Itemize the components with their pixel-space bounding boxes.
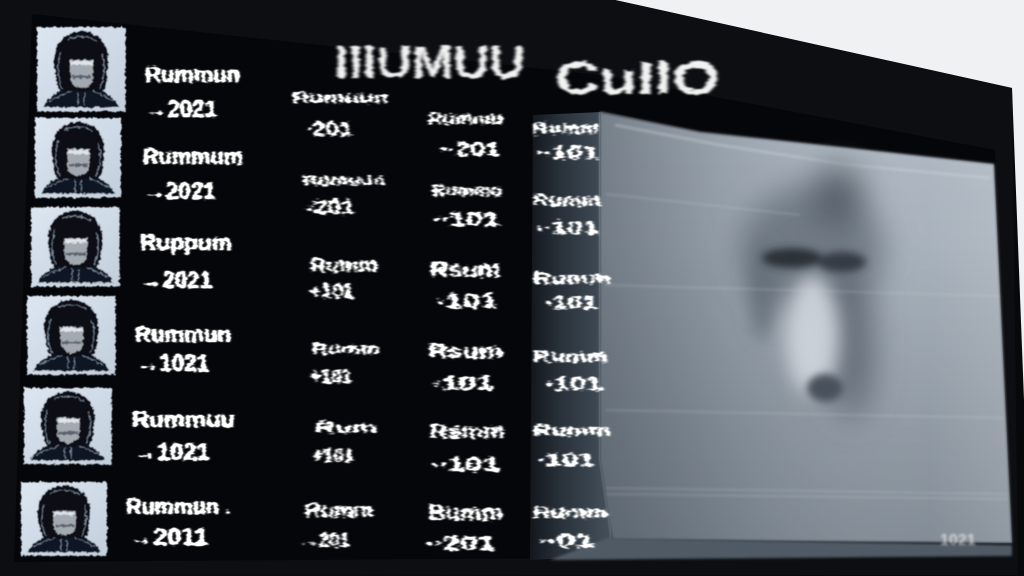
title xyxy=(335,36,720,104)
title: CuIIO xyxy=(555,52,720,104)
panel corner label: 1021 xyxy=(940,532,976,549)
fourth column: ∙101 xyxy=(545,293,597,313)
third column: Rsum xyxy=(428,341,503,363)
avatar 4 xyxy=(27,296,116,375)
names column: Rummun xyxy=(145,62,240,87)
third column: Rsum xyxy=(430,257,500,282)
third column: Rummu xyxy=(428,109,503,128)
names column: Rummum xyxy=(143,144,243,169)
names column: →2021 xyxy=(145,96,217,123)
fourth column: ∙101 xyxy=(537,450,595,470)
names column: →2021 xyxy=(143,178,216,205)
avatar 2 xyxy=(35,118,121,198)
third column xyxy=(425,109,505,555)
fourth column: Rumm xyxy=(533,421,611,440)
third column: ∙101 xyxy=(432,373,494,395)
fourth column: ∙∙101 xyxy=(535,143,599,163)
second column: →201 xyxy=(300,530,350,552)
fourth column: Rumm xyxy=(533,269,611,288)
names column: →2021 xyxy=(140,267,212,294)
second column: Rumuun xyxy=(292,90,388,107)
avatar 5 xyxy=(24,388,112,464)
second column: -201 xyxy=(305,197,355,219)
avatars xyxy=(21,27,126,556)
panel base xyxy=(600,112,1012,543)
second column xyxy=(292,90,388,552)
panel left fringe xyxy=(530,112,612,560)
avatar 3 xyxy=(31,207,120,287)
second column: ∙201 xyxy=(305,119,353,141)
names column: Rummuu xyxy=(132,407,235,432)
fourth column: ∙∙01 xyxy=(537,531,595,551)
names column: Rummun xyxy=(135,322,231,347)
names column: Rummun . xyxy=(126,494,231,519)
second column: Rum xyxy=(315,420,377,437)
second column: Rumm xyxy=(310,255,378,277)
third column: Rummu xyxy=(432,181,502,200)
third column: ∙101 xyxy=(436,291,498,313)
fourth column: ∙101 xyxy=(545,374,603,394)
third column: ∙∙201 xyxy=(440,139,500,161)
second column: +101 xyxy=(310,281,354,303)
second column: Rumm xyxy=(312,341,380,358)
panel lower band xyxy=(550,538,1012,560)
fourth column: Rumm xyxy=(533,503,608,522)
third column: Rsmm xyxy=(430,421,505,443)
title: IIIUMUU xyxy=(335,36,525,88)
fourth column: Rumm xyxy=(533,347,608,366)
ghost face xyxy=(740,165,884,420)
names column xyxy=(126,62,243,551)
names column: →1021 xyxy=(137,350,209,377)
third column: ∙∙201 xyxy=(425,533,495,555)
second column: Rumm xyxy=(305,500,373,522)
names column: →1021 xyxy=(133,439,210,466)
panel row lines xyxy=(606,194,1008,499)
avatar 6 xyxy=(21,482,107,556)
avatar 1 xyxy=(37,27,126,111)
names column: Ruppum xyxy=(140,230,232,255)
fourth column: Rumm xyxy=(533,119,599,138)
second column: +101 xyxy=(312,445,354,467)
top glare xyxy=(615,125,990,178)
fourth column: ∙∙101 xyxy=(535,218,599,238)
fourth column xyxy=(533,119,611,551)
panel: frosted overlay xyxy=(530,112,1012,560)
second column: Rumuun xyxy=(303,172,385,189)
second column: +101 xyxy=(310,366,352,388)
fourth column: Rumm xyxy=(533,191,601,210)
third column: Bumm xyxy=(428,500,503,525)
names column: →2011 xyxy=(128,524,208,551)
third column: ∙∙101 xyxy=(430,454,500,476)
third column: ∙∙101 xyxy=(432,209,500,231)
